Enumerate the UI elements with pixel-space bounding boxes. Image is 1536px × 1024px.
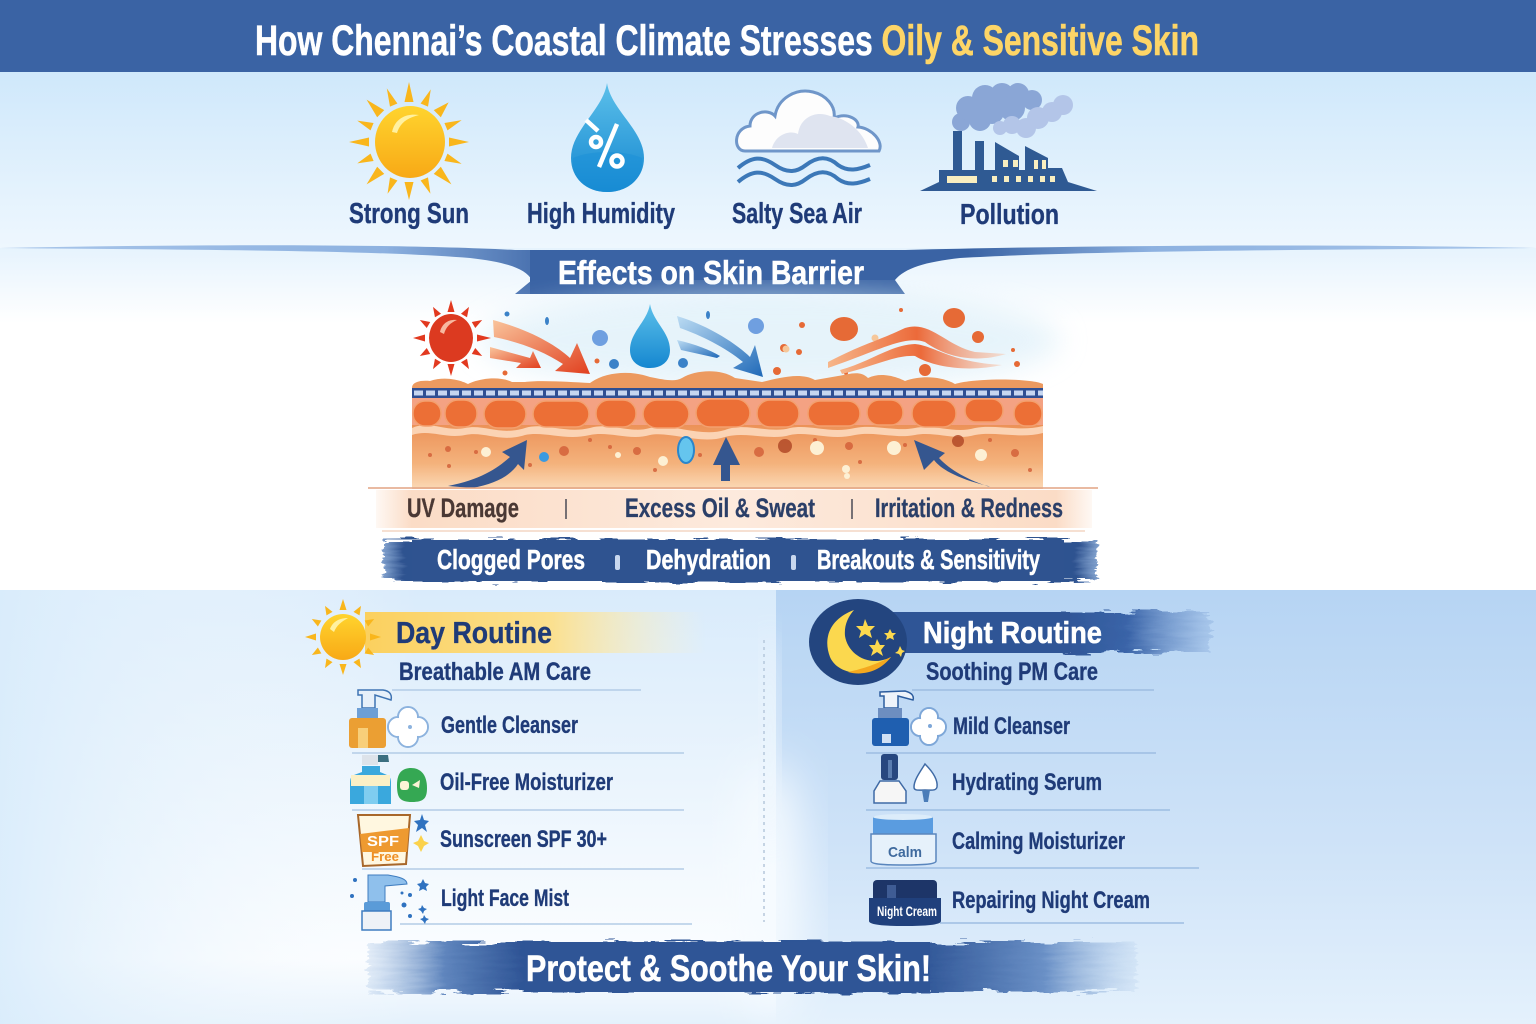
item: oil-free moisturizer: [350, 755, 613, 804]
outcomes band: pores, dehydration, breakouts: Dehydration: [646, 544, 771, 575]
outcomes band: pores, dehydration, breakouts: Clogged Pores: [437, 544, 585, 575]
arrows: moisture: [677, 316, 763, 377]
heading: Day Routine: Day Routine: [396, 615, 552, 650]
label: Repairing Night Cream: [952, 887, 1150, 914]
icon: factory pollution: [920, 83, 1097, 191]
heading: Effects on Skin Barrier: [558, 254, 864, 291]
effects strip: UV, oil, irritation: Excess Oil & Sweat: [625, 493, 815, 523]
outcomes band: pores, dehydration, breakouts: [383, 540, 1097, 581]
item: repairing night cream: [869, 880, 1150, 926]
item: calming moisturizer: Calm: [888, 844, 922, 861]
title: How Chennai’s Coastal Climate Stresses Oily & Sensitive Skin: [255, 17, 1199, 65]
dermis specks: [428, 435, 1032, 472]
heading: Night Routine: Night Routine: [923, 615, 1102, 650]
label: Gentle Cleanser: [441, 712, 578, 739]
item: mild cleanser: [872, 691, 1070, 746]
label: Salty Sea Air: Salty Sea Air: [732, 198, 862, 230]
label: Pollution: Pollution: [960, 199, 1059, 231]
call to action: Protect & Soothe Your Skin!: [526, 948, 931, 989]
label: Hydrating Serum: [952, 769, 1102, 796]
item: repairing night cream: Night Cream: [877, 903, 937, 919]
haze behind aggressors: [480, 290, 1060, 390]
center divider: [763, 640, 765, 922]
arrows: UV rays: [490, 320, 590, 374]
arrows: rising damage: [448, 437, 990, 488]
item: sunscreen: Free: [371, 849, 399, 864]
effects strip: UV, oil, irritation: UV Damage: [407, 493, 519, 523]
section banner: effects on skin barrier: [0, 245, 1536, 294]
panel: night routine: [809, 599, 1210, 926]
item: sunscreen: [358, 814, 607, 866]
blue drops in dermis: [539, 437, 694, 463]
wind: sea air: [828, 326, 1006, 374]
footer banner: [368, 942, 1136, 992]
subheading: Soothing PM Care: [926, 658, 1098, 686]
icon: strong sun: [349, 82, 469, 200]
icon: humidity drop: [571, 83, 644, 192]
label: Calming Moisturizer: [952, 828, 1125, 855]
effects strip: UV, oil, irritation: [368, 488, 1098, 531]
item: sunscreen: SPF: [367, 833, 399, 850]
item: gentle cleanser: [349, 690, 578, 748]
label: Light Face Mist: [441, 885, 569, 912]
icon: cloud and sea: [737, 91, 880, 185]
row dividers: [352, 690, 692, 924]
label: Strong Sun: Strong Sun: [349, 198, 469, 230]
icon: red sun: [413, 300, 491, 376]
subheading: Breathable AM Care: [399, 658, 591, 686]
label: High Humidity: High Humidity: [527, 198, 675, 230]
label: Mild Cleanser: [953, 713, 1070, 740]
item: hydrating serum: [874, 754, 1102, 803]
icon: water drop: [630, 304, 670, 368]
row dividers: [866, 690, 1199, 923]
label: Sunscreen SPF 30+: [440, 826, 607, 853]
icon: moon badge: [809, 599, 907, 685]
day header ribbon: [365, 612, 705, 653]
skin cells: [413, 399, 1042, 428]
icon: day sun: [305, 599, 381, 675]
skin cross-section: [412, 371, 1043, 489]
climate factors row: [349, 82, 1097, 231]
particles: [502, 308, 1020, 389]
effects strip: UV, oil, irritation: Irritation & Redness: [875, 493, 1063, 523]
item: face mist: [350, 875, 569, 930]
night header ribbon: [890, 612, 1210, 653]
title banner: [0, 0, 1536, 72]
panel: day routine: [305, 599, 705, 930]
outcomes band: pores, dehydration, breakouts: Breakouts & Sensitivity: [817, 544, 1040, 575]
skin barrier diagram: [412, 290, 1060, 489]
item: calming moisturizer: [871, 814, 1125, 865]
label: Oil-Free Moisturizer: [440, 769, 613, 796]
